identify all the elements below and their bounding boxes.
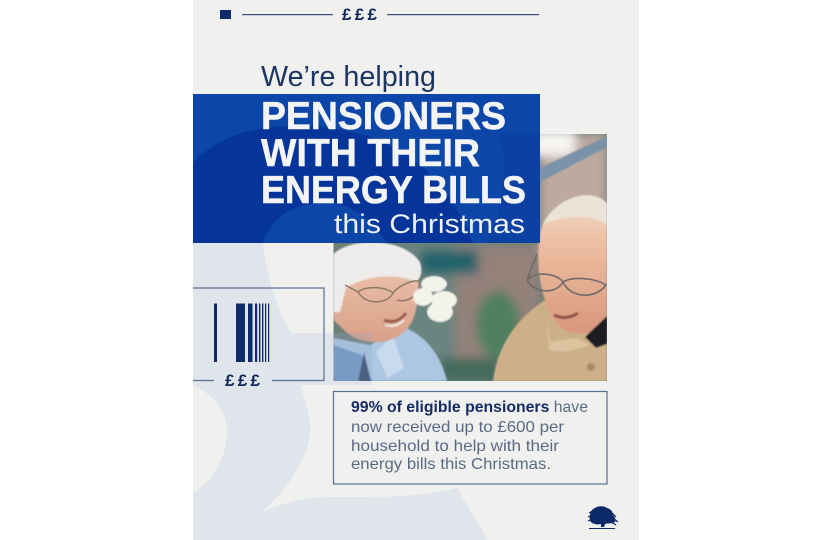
- poster background: [193, 0, 639, 540]
- photo of two smiling pensioners: [333, 130, 607, 385]
- icon: conservative tree logo: [588, 506, 618, 528]
- white flowers: [413, 276, 457, 322]
- top marker square: [220, 10, 231, 19]
- top divider with pound signs: £££: [342, 5, 378, 24]
- background pound sign: [193, 243, 488, 540]
- callout text: [351, 399, 588, 473]
- main heading: ENERGY BILLS: [261, 169, 526, 212]
- woman's face: [334, 276, 420, 344]
- barcode panel: [193, 288, 324, 390]
- dark pound sign on banner: [193, 126, 473, 243]
- woman's glasses: [345, 281, 420, 302]
- callout text: 99% of eligible pensioners have: [351, 399, 588, 416]
- main heading: [261, 95, 526, 212]
- man's jumper: [493, 298, 607, 381]
- callout text: energy bills this Christmas.: [351, 456, 551, 473]
- man's glasses: [527, 254, 606, 295]
- roof gutter: [540, 136, 607, 182]
- woman's blouse: [334, 327, 447, 381]
- callout text: household to help with their: [351, 438, 559, 455]
- main heading: PENSIONERS: [261, 95, 506, 138]
- woman: [334, 242, 447, 381]
- pound tint over photo: [333, 333, 372, 385]
- woman's hair: [334, 242, 421, 312]
- main heading: WITH THEIR: [261, 132, 480, 175]
- photo background: [400, 130, 607, 383]
- callout text: now received up to £600 per: [351, 419, 564, 436]
- man: [493, 195, 607, 381]
- barcode pound signs: £££: [225, 371, 261, 390]
- man's head: [537, 216, 607, 334]
- callout box: [334, 392, 607, 484]
- heading intro: We’re helping: [261, 61, 436, 93]
- heading closing line: this Christmas: [334, 209, 525, 239]
- top blue banner: [193, 94, 540, 243]
- barcode: [214, 304, 269, 362]
